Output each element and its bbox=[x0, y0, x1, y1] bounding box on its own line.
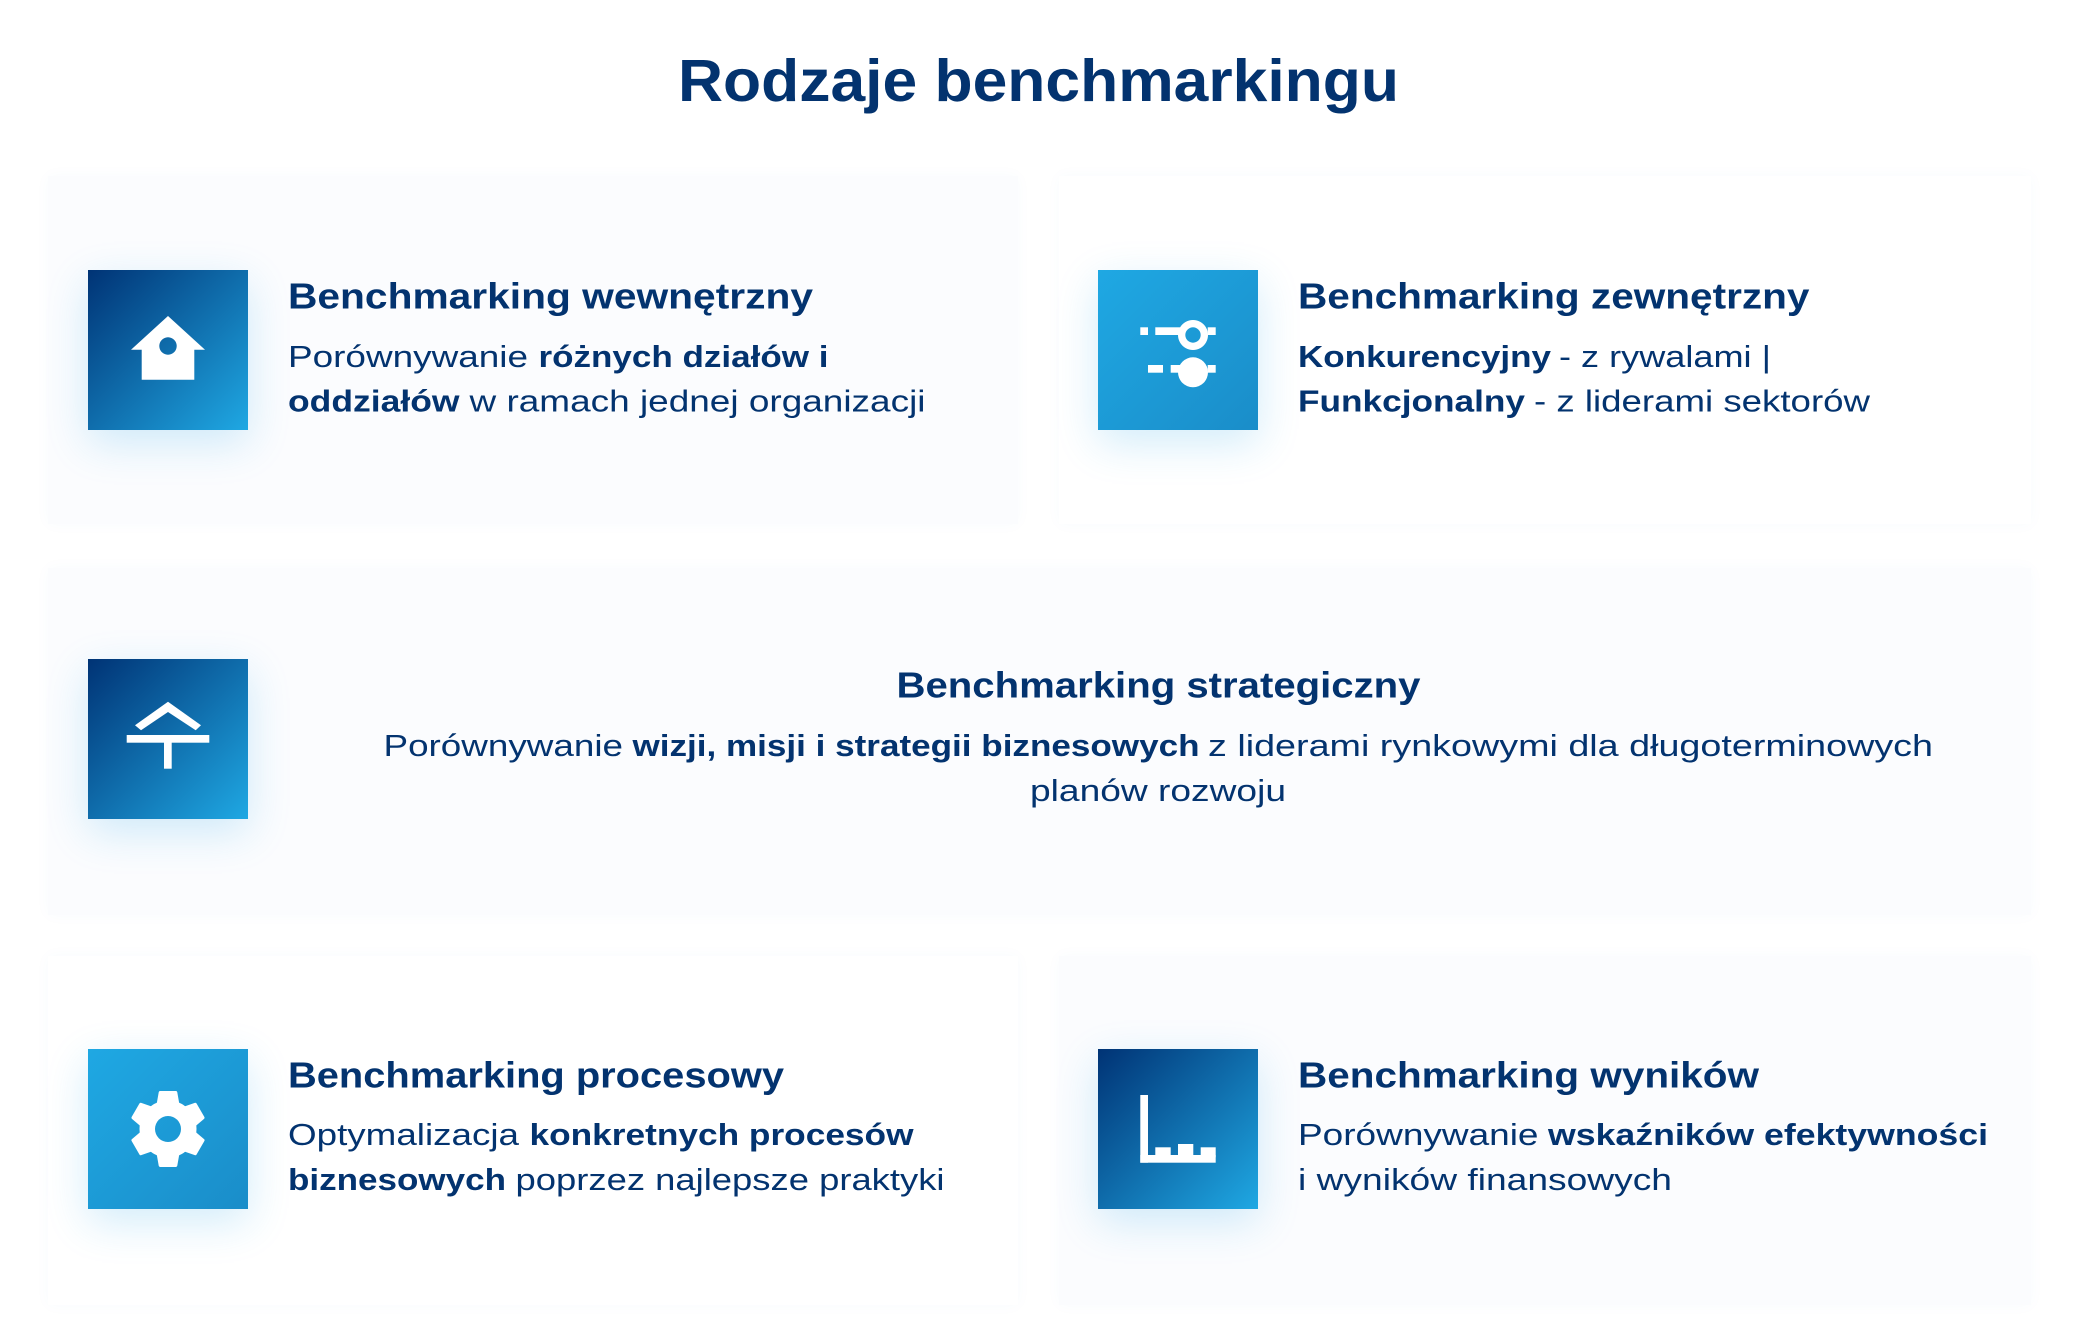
text: benchmarking wyników: i wyników finansowych bbox=[1298, 1162, 1672, 1197]
icon: house bbox=[88, 270, 248, 430]
text: benchmarking zewnętrzny: - z rywalami | bbox=[1559, 339, 1771, 374]
panel: benchmarking procesowy bbox=[70, 1044, 942, 1240]
text: benchmarking zewnętrzny: Konkurencyjny bbox=[1298, 339, 1552, 374]
icon: roof and table bbox=[88, 659, 248, 819]
icon: bar chart bbox=[1098, 1049, 1258, 1209]
text: benchmarking zewnętrzny: - z liderami sektorów bbox=[1534, 384, 1871, 418]
text: benchmarking procesowy: Benchmarking procesowy bbox=[288, 1054, 784, 1096]
panel: benchmarking zewnętrzny bbox=[1059, 176, 2031, 524]
text: benchmarking wyników: Benchmarking wyników bbox=[1298, 1054, 1760, 1096]
text: benchmarking procesowy: poprzez najlepsze praktyki bbox=[516, 1162, 944, 1197]
icon: sliders bbox=[1098, 270, 1258, 430]
panel: benchmarking wewnętrzny bbox=[48, 176, 1018, 524]
text: benchmarking wewnętrzny: w ramach jednej organizacji bbox=[468, 384, 926, 418]
panel: benchmarking wyników bbox=[1059, 956, 2031, 1305]
icon: gear bbox=[88, 1049, 248, 1209]
text: benchmarking strategiczny: z liderami rynkowymi dla długoterminowych bbox=[1208, 728, 1933, 763]
text: benchmarking procesowy: Optymalizacja bbox=[288, 1117, 520, 1152]
title: Rodzaje benchmarkingu bbox=[678, 48, 1399, 114]
text: benchmarking strategiczny: wizji, misji i strategii biznesowych bbox=[631, 728, 1200, 763]
text: benchmarking wewnętrzny: Porównywanie bbox=[288, 339, 528, 374]
text: benchmarking wewnętrzny: oddziałów bbox=[288, 384, 461, 418]
text: benchmarking procesowy: biznesowych bbox=[288, 1162, 506, 1197]
text: benchmarking strategiczny: Porównywanie bbox=[384, 728, 623, 763]
text: benchmarking wyników bbox=[1298, 1054, 1988, 1197]
text: benchmarking wyników: Porównywanie bbox=[1298, 1117, 1538, 1152]
text: benchmarking zewnętrzny: Benchmarking zewnętrzny bbox=[1298, 276, 1810, 316]
text: benchmarking strategiczny bbox=[384, 664, 1933, 808]
text: benchmarking wewnętrzny bbox=[288, 276, 926, 418]
text: benchmarking procesowy bbox=[288, 1054, 944, 1197]
text: benchmarking strategiczny: planów rozwoju bbox=[1030, 773, 1286, 808]
text: benchmarking zewnętrzny: Funkcjonalny bbox=[1298, 384, 1526, 418]
text: benchmarking wyników: wskaźników efektywności bbox=[1547, 1117, 1988, 1152]
text: benchmarking wewnętrzny: Benchmarking wewnętrzny bbox=[288, 276, 813, 316]
text: benchmarking strategiczny: Benchmarking strategiczny bbox=[896, 664, 1420, 706]
text: benchmarking wewnętrzny: różnych działów i bbox=[538, 339, 828, 374]
text: benchmarking procesowy: konkretnych procesów bbox=[530, 1117, 915, 1152]
text: benchmarking zewnętrzny bbox=[1298, 276, 1871, 418]
panel: benchmarking strategiczny bbox=[48, 568, 2031, 915]
